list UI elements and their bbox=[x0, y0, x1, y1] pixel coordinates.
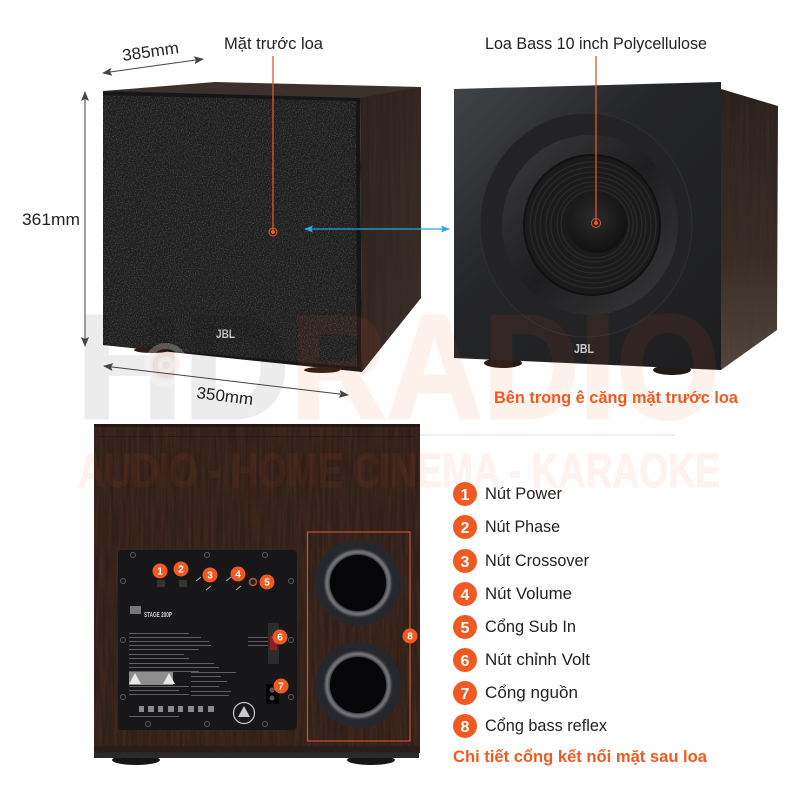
legend item 3: Nút Crossover bbox=[485, 552, 589, 570]
caption: rear connections: Chi tiết cổng kết nối mặt sau loa bbox=[453, 748, 708, 766]
watermark: RADIO: RADIO bbox=[290, 285, 720, 450]
speaker front view with grille: JBL bbox=[216, 327, 235, 341]
panel model label: STAGE 200P bbox=[144, 612, 172, 619]
legend item 1 bbox=[453, 482, 563, 506]
legend item 3 bbox=[453, 549, 589, 573]
panel warning label bbox=[129, 672, 175, 685]
legend item 2 bbox=[453, 515, 560, 539]
speaker front view with grille bbox=[103, 82, 421, 373]
legend item 2: 2 bbox=[461, 520, 470, 537]
rear amplifier panel bbox=[118, 550, 297, 730]
panel number badges: 2 bbox=[178, 564, 184, 576]
panel number badges: 5 bbox=[264, 578, 270, 588]
dimension: depth 385mm bbox=[103, 39, 203, 73]
panel number badges: 3 bbox=[207, 570, 213, 582]
speaker driver view: JBL bbox=[574, 341, 594, 356]
panel fine print bbox=[129, 633, 268, 717]
legend item 2: Nút Phase bbox=[485, 518, 560, 536]
legend item 4: Nút Volume bbox=[485, 585, 572, 603]
legend item 7: Cổng nguồn bbox=[485, 684, 578, 702]
panel certification marks bbox=[139, 702, 254, 724]
legend item 6 bbox=[453, 648, 590, 672]
callout line: bass driver bbox=[592, 56, 600, 228]
panel number badges: 7 bbox=[278, 682, 284, 692]
panel number badges: 6 bbox=[277, 632, 283, 644]
legend item 8: Cổng bass reflex bbox=[485, 717, 608, 735]
legend item 8: 8 bbox=[461, 719, 470, 736]
label: front of speaker: Mặt trước loa bbox=[224, 35, 324, 53]
speaker rear view bbox=[94, 424, 420, 765]
watermark: HD: HD bbox=[76, 285, 290, 450]
legend item 5: 5 bbox=[461, 620, 470, 637]
bass reflex ports bbox=[315, 540, 401, 728]
panel model label bbox=[130, 606, 172, 619]
legend item 6: Nút chỉnh Volt bbox=[485, 651, 590, 669]
legend item 4 bbox=[453, 582, 572, 606]
watermark rule bbox=[420, 434, 675, 436]
legend bbox=[453, 482, 608, 738]
watermark: pin icon bbox=[147, 346, 185, 384]
dimension: width 350mm: 350mm bbox=[196, 384, 254, 409]
dimension: width 350mm bbox=[104, 366, 348, 409]
panel number badges: 8 bbox=[407, 632, 413, 642]
legend item 4: 4 bbox=[461, 587, 470, 604]
port highlight frame bbox=[308, 532, 410, 741]
panel number badges: 4 bbox=[235, 570, 241, 580]
legend item 1: Nút Power bbox=[485, 485, 563, 503]
legend item 3: 3 bbox=[461, 554, 470, 571]
label: bass driver: Loa Bass 10 inch Polycellulose bbox=[485, 35, 707, 53]
legend item 5: Cổng Sub In bbox=[485, 618, 576, 636]
speaker driver view bbox=[454, 82, 778, 375]
legend item 5 bbox=[453, 615, 576, 639]
dimension: height 361mm: 361mm bbox=[22, 211, 80, 229]
caption: inside the front: Bên trong ê căng mặt trước loa bbox=[494, 389, 739, 407]
panel number badges bbox=[152, 562, 418, 694]
callout line: front of speaker bbox=[269, 56, 277, 236]
legend item 1: 1 bbox=[461, 487, 470, 504]
legend item 6: 6 bbox=[461, 653, 470, 670]
legend item 7 bbox=[453, 681, 578, 705]
legend item 7: 7 bbox=[461, 686, 470, 703]
legend item 8 bbox=[453, 714, 608, 738]
panel screws bbox=[120, 552, 294, 726]
dimension: depth 385mm: 385mm bbox=[121, 39, 180, 65]
panel number badges: 1 bbox=[157, 566, 163, 578]
panel switches and controls bbox=[157, 577, 279, 704]
arrow: grille to driver bbox=[305, 228, 449, 230]
